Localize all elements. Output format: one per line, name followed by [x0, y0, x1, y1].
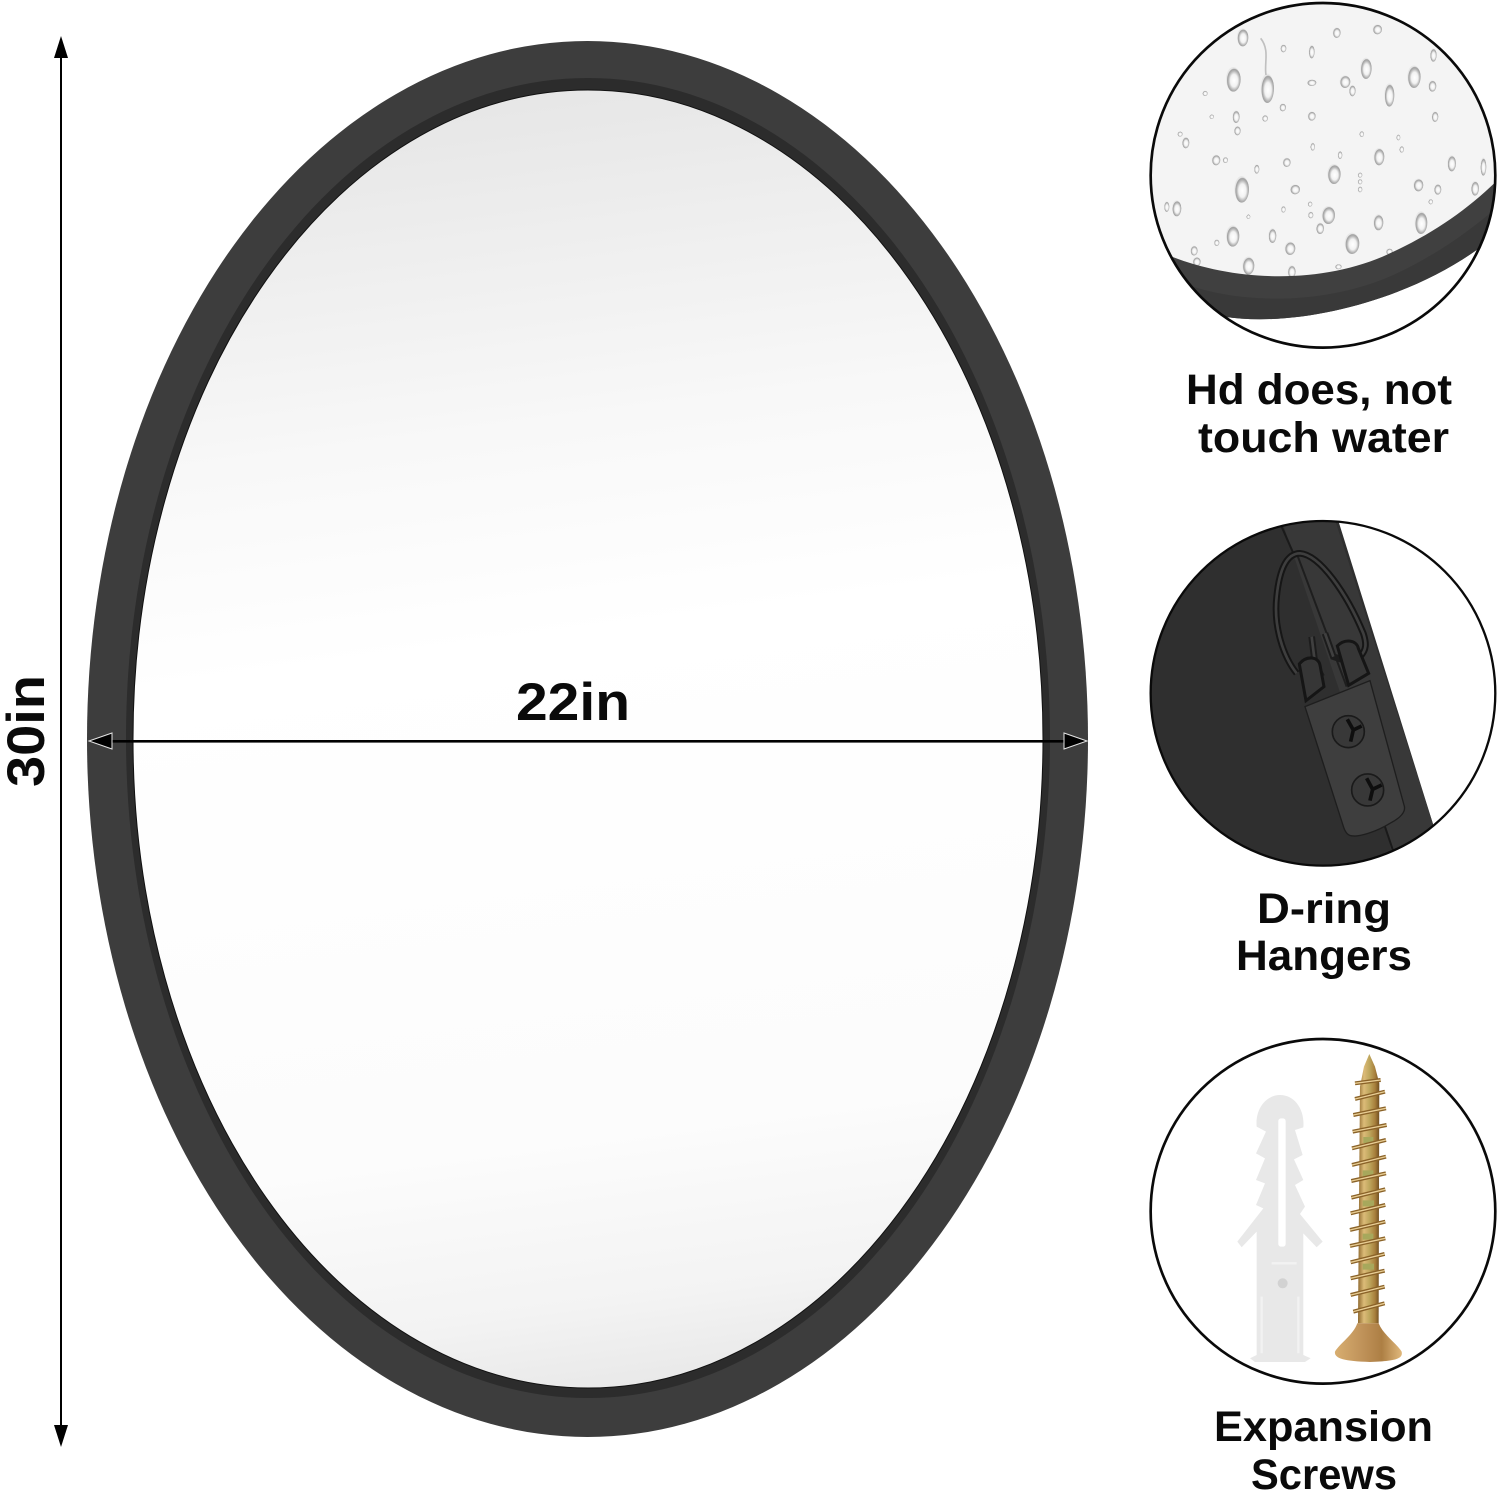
caption: Expansion Screws: Expansion — [1214, 1403, 1433, 1451]
caption: Hd does, not touch water: Hd does, not — [1186, 366, 1452, 414]
oval mirror — [87, 41, 1088, 1437]
D ring — [1276, 553, 1366, 673]
screw 2 — [1352, 774, 1384, 806]
caption: Expansion Screws — [1214, 1403, 1433, 1492]
caption: D-ring Hangers — [1236, 885, 1412, 980]
icon: D-ring hanger on mirror back — [1140, 510, 1495, 877]
height arrow — [54, 36, 68, 1447]
screw 1 — [1332, 716, 1364, 748]
caption: Hd does, not touch water: touch water — [1198, 414, 1449, 462]
icon: water droplets on mirror edge — [1140, 0, 1500, 348]
panel: D-ring hanger detail — [1140, 510, 1495, 980]
gold screw — [1358, 1054, 1379, 1323]
icon: wall anchor and gold screw — [1151, 1039, 1495, 1384]
caption: Hd does, not touch water — [1186, 366, 1452, 462]
caption: D-ring Hangers: Hangers — [1236, 932, 1412, 980]
hanger plate — [1305, 681, 1405, 836]
wall anchor — [1237, 1095, 1323, 1362]
caption: D-ring Hangers: D-ring — [1257, 885, 1391, 933]
panel: expansion screws detail — [1151, 1039, 1495, 1492]
panel: water-resistant detail — [1140, 0, 1500, 462]
width arrow — [89, 733, 1087, 749]
width label: 22in: 22in — [516, 673, 630, 732]
